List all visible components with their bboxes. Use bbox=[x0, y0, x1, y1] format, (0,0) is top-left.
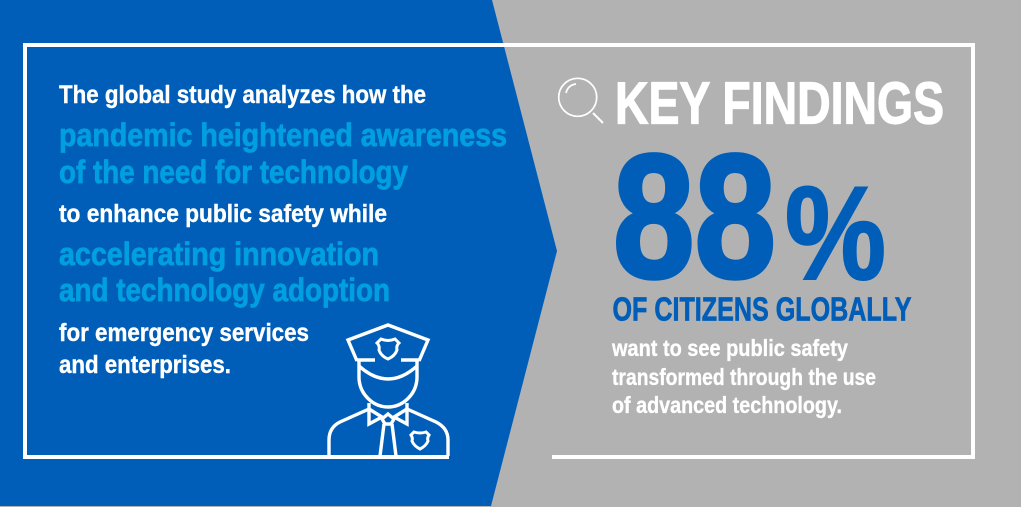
text block: study description: accelerating innovation bbox=[59, 236, 379, 272]
icon: police officer bbox=[329, 325, 448, 456]
text block: study description: and technology adoption bbox=[59, 272, 390, 308]
hat brim bbox=[357, 360, 419, 379]
tie bbox=[380, 424, 396, 456]
heading: key findings: KEY FINDINGS bbox=[615, 70, 944, 136]
subheading: of citizens globally: OF CITIZENS GLOBALLY bbox=[612, 290, 912, 328]
icon: magnifying glass bbox=[559, 78, 603, 123]
statistic: 88 percent: 88 bbox=[613, 119, 776, 315]
text block: finding description: of advanced technology. bbox=[612, 392, 842, 418]
white frame bbox=[25, 45, 973, 457]
hat badge bbox=[377, 339, 399, 359]
text block: finding description: transformed through the use bbox=[612, 364, 876, 390]
text block: study description: for emergency services bbox=[59, 319, 309, 347]
text block: study description: pandemic heightened awareness bbox=[59, 117, 507, 153]
text block: finding description: want to see public safety bbox=[611, 335, 848, 361]
text block: study description: and enterprises. bbox=[59, 351, 231, 379]
text block: study description bbox=[59, 81, 507, 379]
text block: finding description bbox=[611, 335, 876, 418]
chest badge bbox=[411, 432, 429, 449]
hat bbox=[348, 325, 428, 361]
text block: study description: to enhance public safety while bbox=[59, 200, 387, 228]
text block: study description: The global study analyzes how the bbox=[59, 81, 426, 109]
collar bbox=[369, 403, 407, 424]
panel: blue arrow bbox=[0, 0, 557, 506]
face bbox=[359, 361, 417, 407]
text block: study description: of the need for technology bbox=[59, 154, 408, 190]
tie knot bbox=[382, 414, 394, 424]
shoulders bbox=[329, 409, 448, 456]
statistic: 88 percent: % bbox=[785, 160, 886, 308]
